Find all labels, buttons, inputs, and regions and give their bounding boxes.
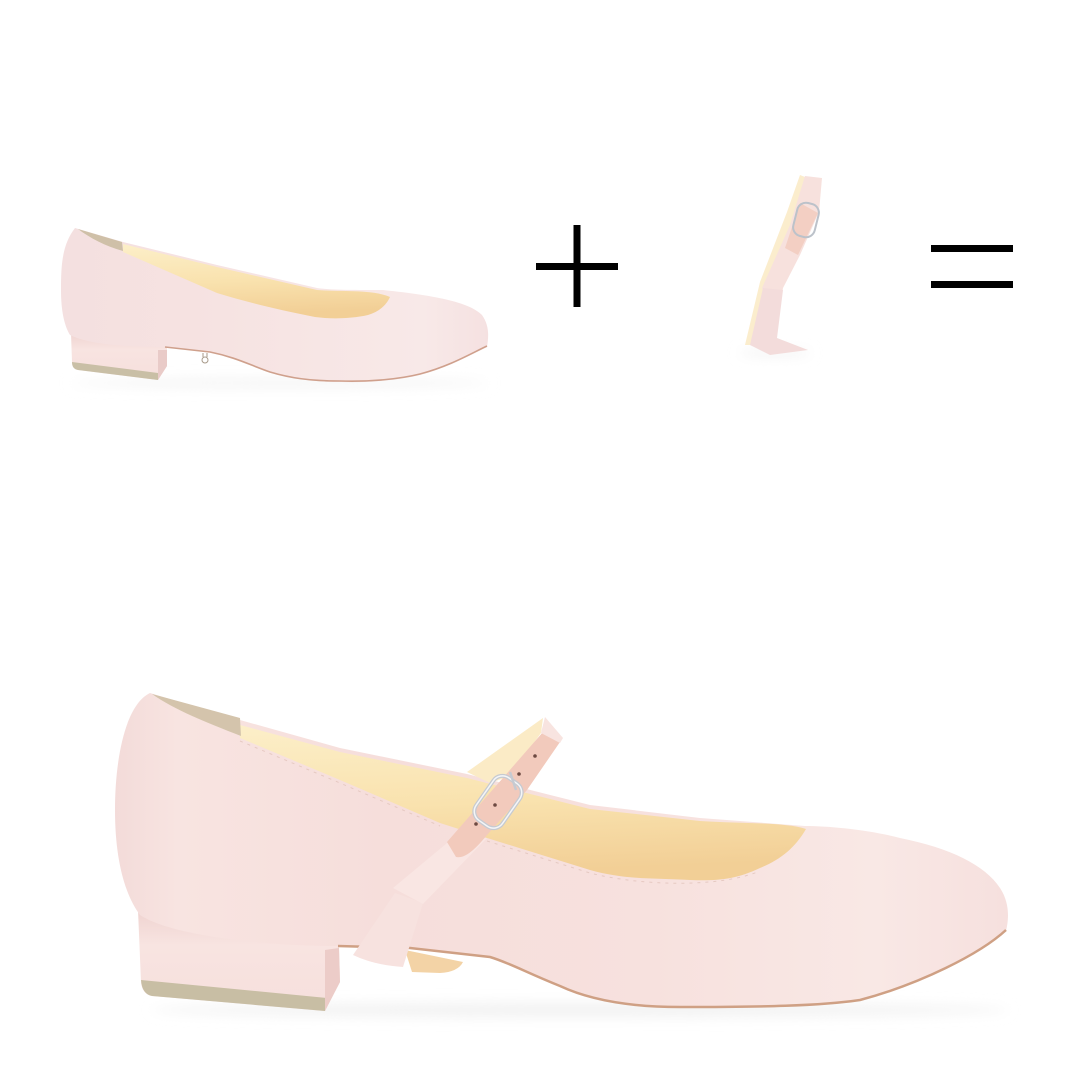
- pink inner strap: [785, 203, 818, 255]
- strap accessory: [739, 175, 822, 356]
- strap keeper: [393, 838, 487, 904]
- icon: equals sign: [931, 245, 1013, 288]
- icon: plus sign: [536, 225, 618, 307]
- sole edge: [338, 930, 1006, 1007]
- insole: [123, 244, 390, 318]
- strap band: [762, 176, 822, 318]
- back lining: [78, 229, 123, 251]
- strap tip binding: [541, 717, 563, 743]
- buckle: [470, 772, 526, 832]
- heel: [71, 333, 167, 380]
- strap holes: [474, 754, 537, 826]
- small flat shoe without strap: [61, 228, 490, 387]
- strap lining: [745, 175, 805, 345]
- pink strap: [447, 732, 560, 857]
- large assembled mary jane shoe: [115, 693, 1010, 1017]
- heel: [138, 910, 340, 1011]
- back lining: [152, 694, 241, 736]
- hook under strap: [405, 950, 463, 973]
- rear strap over foot opening: [467, 718, 543, 783]
- small hook: [203, 353, 207, 357]
- upper body: [115, 693, 1008, 1008]
- insole: [240, 725, 806, 880]
- sole edge: [165, 346, 487, 381]
- upper body: [61, 228, 488, 382]
- strap lower band: [353, 893, 423, 967]
- toe piece: [750, 288, 808, 355]
- buckle: [791, 201, 821, 239]
- collar stitching: [240, 741, 760, 883]
